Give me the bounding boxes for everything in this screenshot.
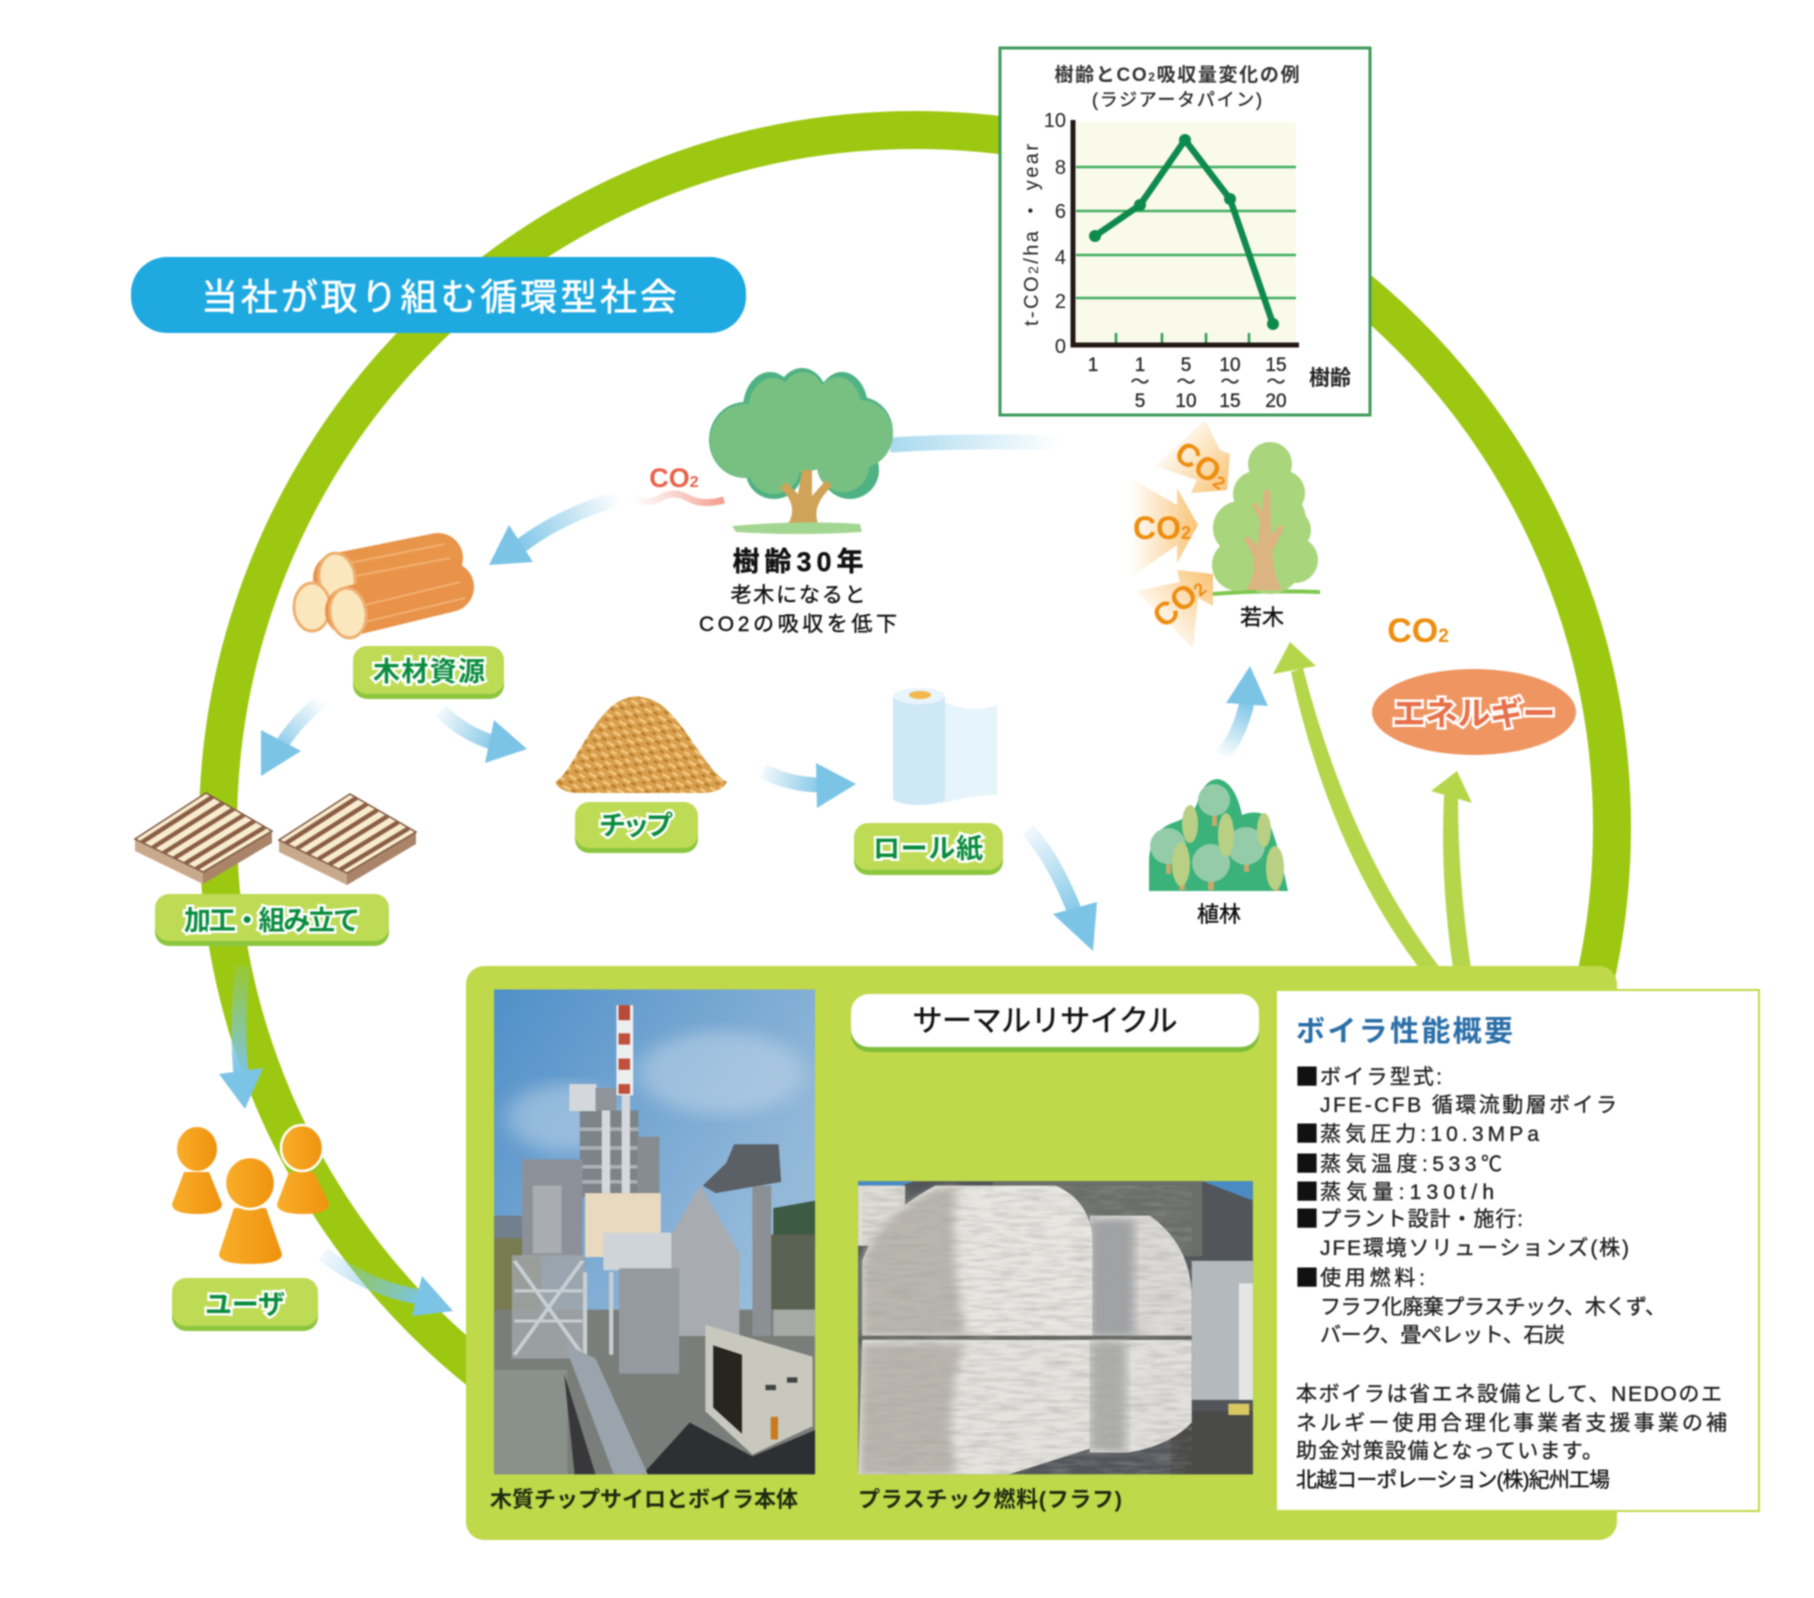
arrow: wood to chips bbox=[441, 711, 527, 763]
label: processing bbox=[155, 894, 389, 946]
x axis labels: 15 bbox=[1219, 391, 1241, 412]
label: chips bbox=[575, 802, 698, 853]
text: tree age 30 bbox=[699, 547, 897, 636]
label: wood resource: 木材資源 bbox=[373, 657, 485, 687]
y axis labels: 0 bbox=[1055, 336, 1066, 358]
heading: boiler overview: ボイラ性能概要 bbox=[1296, 1015, 1513, 1048]
specs list: バーク、畳ペレット、石炭 bbox=[1320, 1324, 1565, 1347]
label: chips: チップ bbox=[599, 811, 673, 841]
specs list: ■ bbox=[1295, 1114, 1319, 1149]
icon: users bbox=[172, 1125, 329, 1264]
energy ellipse bbox=[1372, 669, 1576, 755]
icon: logs bbox=[294, 544, 465, 640]
chart title bbox=[1054, 64, 1300, 110]
note text: ネルギー使用合理化事業者支援事業の補 bbox=[1296, 1412, 1727, 1435]
label: red CO2 with wave bbox=[632, 463, 724, 503]
specs list: ■ bbox=[1295, 1258, 1319, 1293]
energy ellipse: エネルギー bbox=[1392, 695, 1556, 732]
icon: CO2 arrows: CO2 bbox=[1145, 569, 1212, 635]
x axis labels: 樹齢 bbox=[1309, 367, 1351, 390]
x axis labels bbox=[1088, 355, 1351, 412]
x axis labels: 〜 bbox=[1266, 372, 1286, 393]
specs list: ボイラ型式: bbox=[1320, 1066, 1442, 1089]
x axis labels: 〜 bbox=[1176, 372, 1196, 393]
label: users: ユーザ bbox=[205, 1290, 285, 1320]
label: roll paper bbox=[854, 823, 1003, 875]
note text: 北越コーポレーション(株)紀州工場 bbox=[1296, 1469, 1610, 1492]
x axis labels: 15 bbox=[1265, 355, 1287, 376]
icon: old tree bbox=[709, 368, 893, 534]
arrow: wood to pallets bbox=[261, 700, 322, 776]
icon: roll paper bbox=[893, 688, 997, 805]
note text bbox=[1296, 1383, 1727, 1492]
specs list: 蒸気圧力:10.3MPa bbox=[1320, 1123, 1539, 1146]
x axis labels: 5 bbox=[1135, 391, 1145, 412]
y axis labels: 10 bbox=[1044, 110, 1066, 132]
arrow: users to thermal recycle bbox=[323, 1254, 453, 1316]
x axis labels: 1 bbox=[1088, 355, 1098, 376]
icon: chip pile bbox=[555, 696, 727, 793]
specs list bbox=[1295, 1057, 1666, 1347]
y axis labels: 8 bbox=[1055, 157, 1066, 179]
specs list: フラフ化廃棄プラスチック、木くず、 bbox=[1320, 1296, 1666, 1319]
x axis labels: 5 bbox=[1181, 355, 1191, 376]
recycling ring bbox=[218, 130, 1612, 1524]
specs list: JFE-CFB 循環流動層ボイラ bbox=[1320, 1094, 1617, 1117]
y axis labels: 6 bbox=[1055, 201, 1066, 223]
arrow: planting to young tree bbox=[1221, 666, 1268, 757]
recycle heading pill: サーマルリサイクル bbox=[912, 1005, 1178, 1038]
label: wood resource bbox=[353, 646, 504, 699]
arrow: old tree to young tree band bbox=[890, 442, 1060, 445]
x axis labels: 〜 bbox=[1220, 372, 1240, 393]
photo: boiler plant bbox=[494, 989, 815, 1474]
note text: 本ボイラは省エネ設備として、NEDOのエ bbox=[1296, 1383, 1722, 1406]
caption: boiler: 木質チップサイロとボイラ本体 bbox=[490, 1487, 798, 1512]
y axis title: t-CO2/ha ・ year bbox=[1021, 144, 1043, 326]
arrow: recycle to energy bbox=[1431, 771, 1472, 968]
text: tree age 30: 老木になると bbox=[730, 584, 866, 607]
recycle heading pill bbox=[851, 994, 1259, 1052]
specs list: 使用燃料: bbox=[1320, 1267, 1425, 1290]
x axis labels: 20 bbox=[1265, 391, 1287, 412]
icon: CO2 arrows: CO2 bbox=[1168, 434, 1236, 496]
y axis labels: 4 bbox=[1055, 247, 1066, 269]
specs list: ■ bbox=[1295, 1172, 1319, 1207]
icon: CO2 arrows bbox=[1130, 420, 1236, 648]
specs list: ■ bbox=[1295, 1057, 1319, 1092]
x axis labels: 〜 bbox=[1130, 372, 1150, 393]
y axis labels bbox=[1044, 110, 1066, 358]
label: planting: 植林 bbox=[1197, 902, 1241, 927]
label: users bbox=[172, 1278, 318, 1331]
label: red CO2 with wave: CO2 bbox=[649, 463, 699, 493]
specs list: プラント設計・施行: bbox=[1320, 1208, 1523, 1231]
note text: 助金対策設備となっています。 bbox=[1296, 1440, 1603, 1463]
icon: CO2 arrows: CO2 bbox=[1133, 510, 1191, 546]
chart panel bbox=[1000, 48, 1370, 415]
panel: thermal recycle bbox=[466, 966, 1617, 1540]
label: young tree: 若木 bbox=[1240, 605, 1284, 630]
icon: forest bbox=[1149, 779, 1288, 891]
x axis labels: 1 bbox=[1135, 355, 1145, 376]
arrow: processing to users bbox=[219, 966, 263, 1109]
arrow: tree to logs bbox=[489, 498, 620, 565]
title pill: 当社が取り組む循環型社会 bbox=[201, 277, 677, 318]
title pill bbox=[131, 257, 746, 333]
y axis labels: 2 bbox=[1055, 291, 1066, 313]
x axis labels: 10 bbox=[1219, 355, 1241, 376]
specs list: 蒸気温度:533℃ bbox=[1320, 1153, 1502, 1176]
label: roll paper: ロール紙 bbox=[873, 834, 983, 864]
label: orange CO2: CO2 bbox=[1387, 612, 1449, 650]
arrow: chips to roll bbox=[763, 763, 856, 808]
line chart bbox=[1073, 120, 1299, 345]
label: processing: 加工・組み立て bbox=[184, 906, 360, 936]
text: tree age 30: 樹齢30年 bbox=[732, 547, 864, 577]
specs list: ■ bbox=[1295, 1144, 1319, 1179]
arrow: recycle to young tree bbox=[1273, 642, 1440, 968]
caption: fuel: プラスチック燃料(フラフ) bbox=[858, 1487, 1122, 1512]
specs list: 蒸気量:130t/h bbox=[1320, 1181, 1494, 1204]
icon: pallets bbox=[135, 793, 416, 885]
specs list: JFE環境ソリューションズ(株) bbox=[1320, 1237, 1629, 1260]
chart title: (ラジアータパイン) bbox=[1092, 90, 1262, 110]
icon: young tree bbox=[1212, 442, 1320, 594]
arrow: roll to thermal recycle bbox=[1028, 830, 1097, 951]
text: tree age 30: CO2の吸収を低下 bbox=[699, 613, 897, 636]
x axis labels: 10 bbox=[1175, 391, 1197, 412]
specs list: ■ bbox=[1295, 1199, 1319, 1234]
panel: boiler specs bbox=[1276, 990, 1759, 1511]
chart title: 樹齢とCO2吸収量変化の例 bbox=[1054, 64, 1300, 86]
photo: plastic fuel bales bbox=[858, 1181, 1253, 1474]
